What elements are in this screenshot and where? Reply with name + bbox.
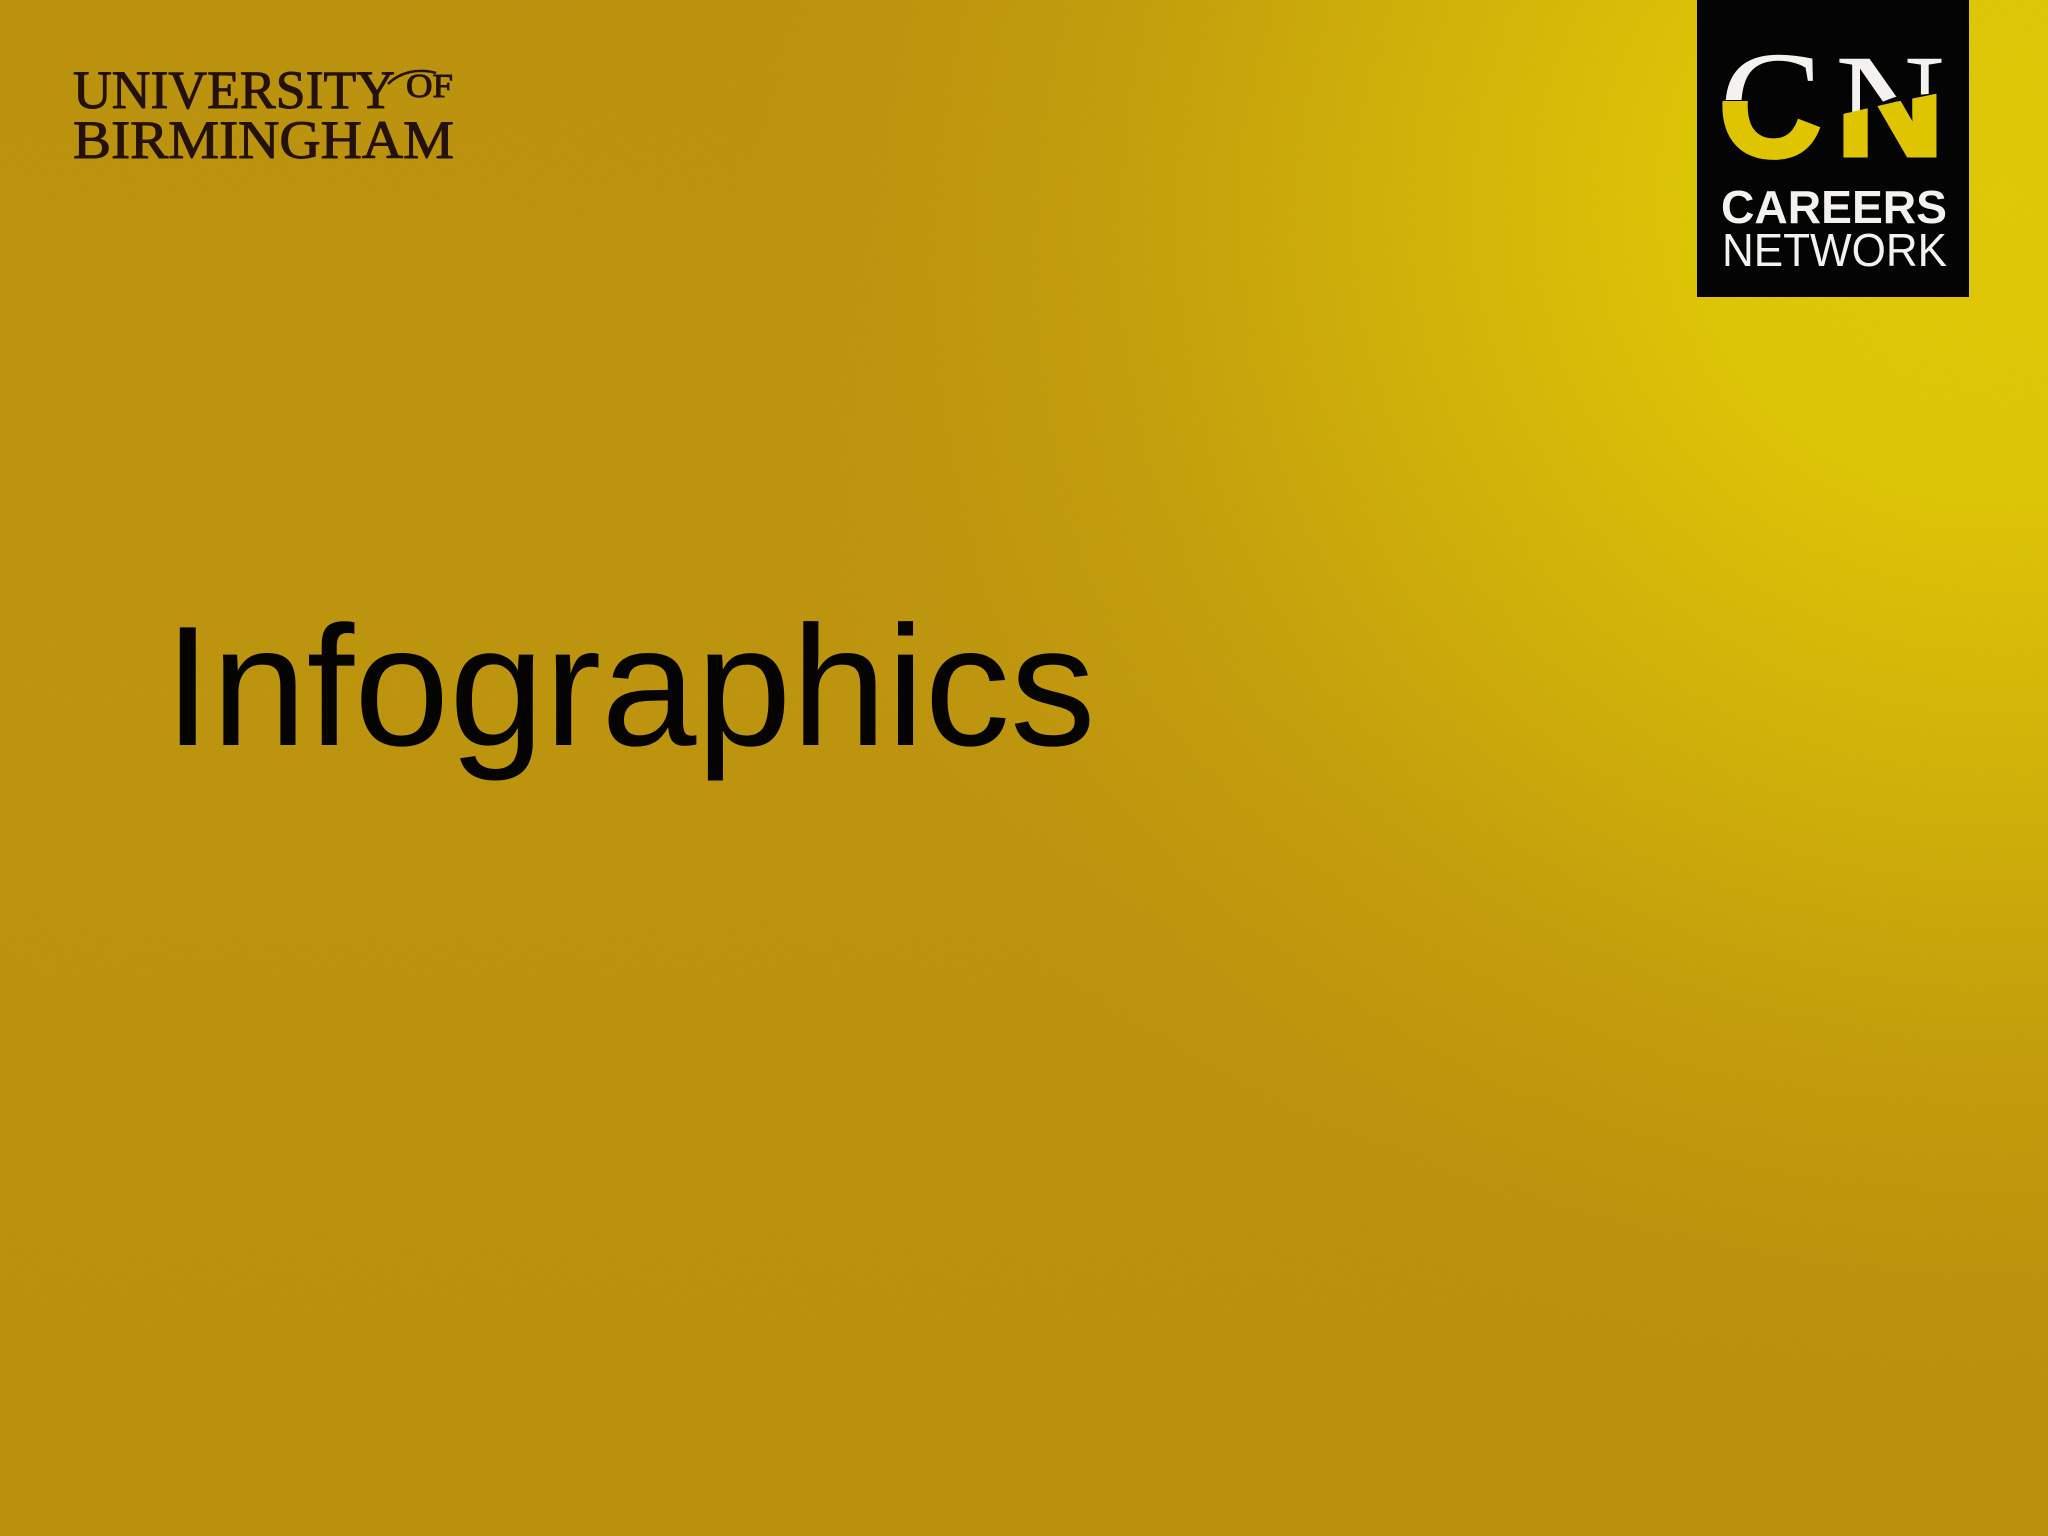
logo: Careers Network: C [1719,19,1823,192]
logo: Careers Network: N [1835,24,1945,190]
logo: Careers Network: C [1719,24,1821,187]
logo: Careers Network: CAREERS [1721,181,1947,233]
logo: University of Birmingham: BIRMINGHAM [73,110,454,170]
logo: University of Birmingham: OF [406,68,453,105]
logo: University of Birmingham: UNIVERSITY [73,60,395,120]
title: Infographics [164,591,1096,782]
logo: University of Birmingham [73,60,454,170]
logo: Careers Network: NETWORK [1722,224,1947,276]
logo: Careers Network [1697,0,1969,297]
logo: Careers Network: N [1836,23,1944,186]
